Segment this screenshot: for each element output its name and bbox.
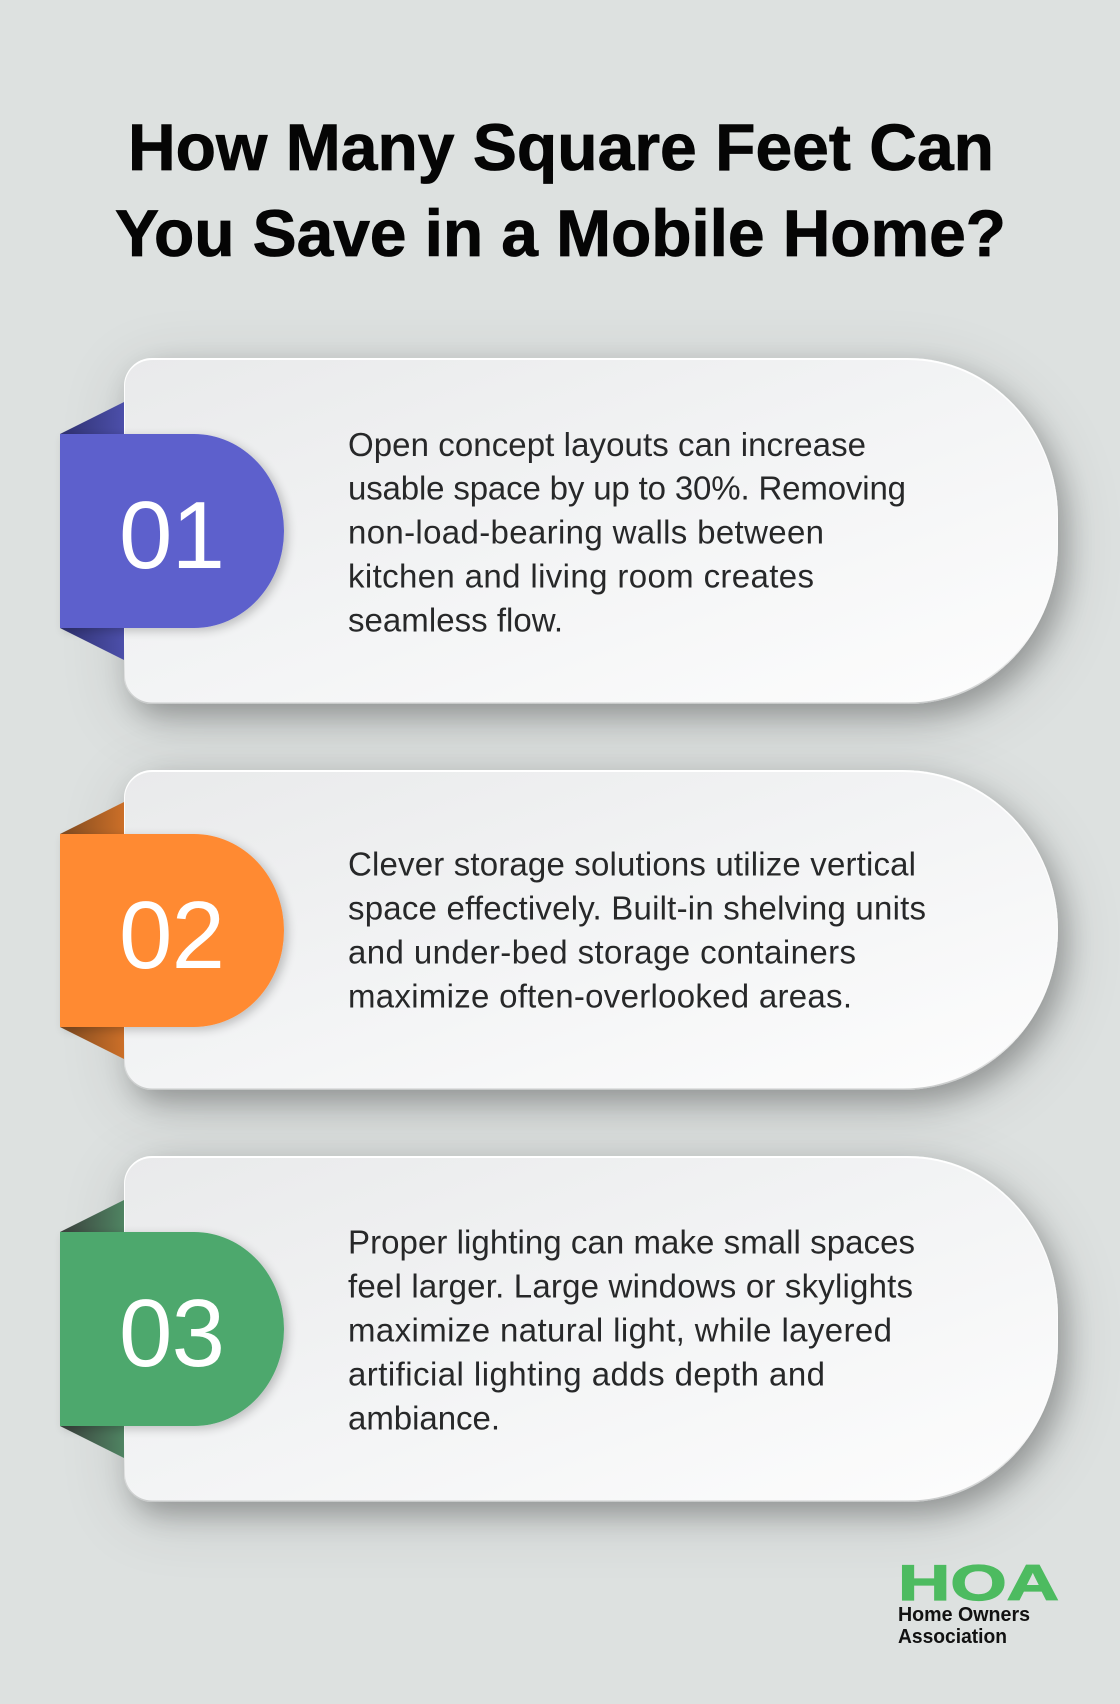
logo: Home Owners Association bbox=[898, 1555, 1059, 1648]
step 3 text: maximize natural light, while layered bbox=[348, 1312, 892, 1348]
title: How Many Square Feet Can bbox=[128, 110, 994, 184]
step 2 text: Clever storage solutions utilize vertical bbox=[348, 846, 916, 882]
ribbon fold top 1 bbox=[60, 402, 124, 434]
number 01: 01 bbox=[119, 482, 225, 589]
step 1 text: usable space by up to 30%. Removing bbox=[348, 470, 906, 506]
panel: step 3 bbox=[60, 1156, 1058, 1502]
step 3 text: Proper lighting can make small spaces bbox=[348, 1224, 915, 1260]
ribbon fold bottom 1 bbox=[60, 628, 124, 660]
step 1 text: seamless flow. bbox=[348, 602, 563, 638]
logo: Home Owners Association: HOA bbox=[898, 1555, 1059, 1611]
step 3 text bbox=[348, 1224, 915, 1436]
step 3 text: feel larger. Large windows or skylights bbox=[348, 1268, 913, 1304]
number 02: 02 bbox=[119, 882, 225, 989]
step 1 text: non-load-bearing walls between bbox=[348, 514, 824, 550]
step 1 text: kitchen and living room creates bbox=[348, 558, 814, 594]
logo: Home Owners Association: Association bbox=[898, 1626, 1007, 1648]
step 2 text: space effectively. Built-in shelving units bbox=[348, 890, 926, 926]
ribbon fold bottom 3 bbox=[60, 1426, 124, 1458]
step 3 text: ambiance. bbox=[348, 1400, 500, 1436]
ribbon fold top 2 bbox=[60, 802, 124, 834]
panel: step 2 bbox=[60, 770, 1058, 1090]
number badge 3 bbox=[60, 1232, 284, 1426]
step 2 text: maximize often-overlooked areas. bbox=[348, 978, 852, 1014]
title bbox=[115, 110, 1006, 270]
panel: step 1 bbox=[60, 358, 1058, 704]
ribbon fold top 3 bbox=[60, 1200, 124, 1232]
title: You Save in a Mobile Home? bbox=[115, 196, 1006, 270]
number 03: 03 bbox=[119, 1280, 225, 1387]
step 2 text bbox=[348, 846, 926, 1014]
step 3 text: artificial lighting adds depth and bbox=[348, 1356, 825, 1392]
card 2 background bbox=[124, 770, 1058, 1090]
logo: Home Owners Association: Home Owners bbox=[898, 1604, 1030, 1626]
number badge 1 bbox=[60, 434, 284, 628]
card 3 background bbox=[124, 1156, 1058, 1502]
step 1 text: Open concept layouts can increase bbox=[348, 426, 866, 463]
card 1 background bbox=[124, 358, 1058, 704]
number badge 2 bbox=[60, 834, 284, 1027]
step 2 text: and under-bed storage containers bbox=[348, 934, 856, 970]
step 1 text bbox=[348, 426, 906, 638]
ribbon fold bottom 2 bbox=[60, 1027, 124, 1059]
